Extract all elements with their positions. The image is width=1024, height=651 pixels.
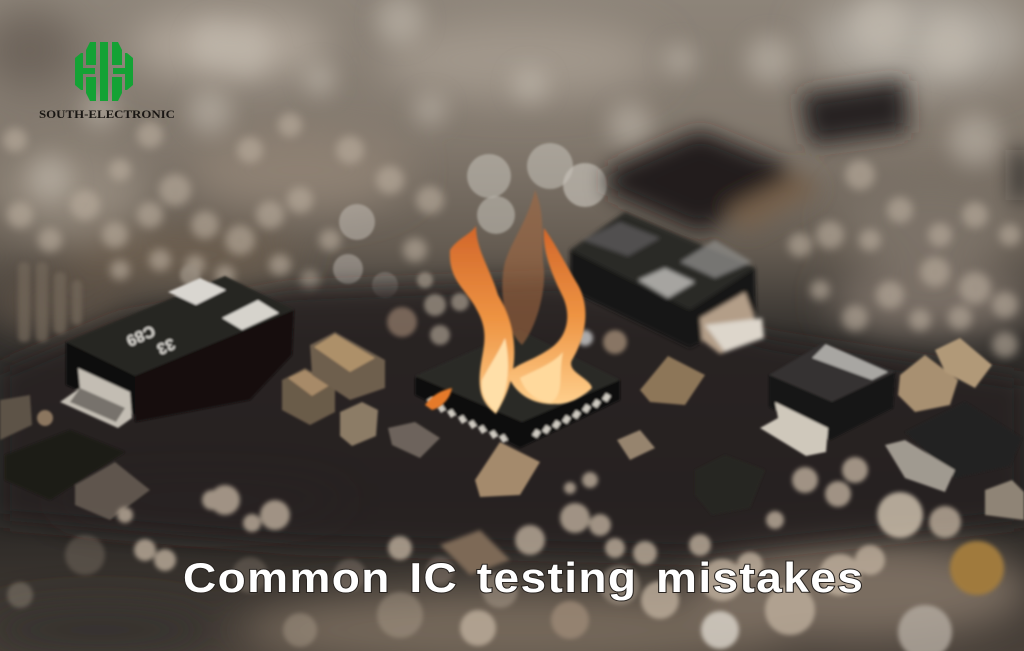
- mid-ground solder pads: [180, 265, 627, 354]
- chip pins: [427, 393, 611, 443]
- printed marks: [123, 321, 177, 357]
- printed marks: 33: [154, 334, 177, 357]
- burning IC chip: [415, 330, 620, 448]
- capacitor: upper centre chip: [570, 212, 764, 354]
- small components: left side: [0, 332, 440, 520]
- lower bokeh: [7, 457, 1004, 651]
- chip body: [415, 333, 620, 448]
- capacitor: right chip: [760, 343, 895, 456]
- title: Common IC testing mistakes: [183, 555, 864, 602]
- bokeh lights: [28, 0, 1001, 200]
- dark PCB mid layer: [0, 280, 1024, 555]
- bokeh texture field: [3, 113, 1021, 358]
- logo wordmark: SOUTH-ELECTRONIC: [39, 107, 175, 121]
- crisp bokeh discs: [333, 143, 607, 298]
- logo mark: [75, 42, 133, 101]
- logo: South-Electronic: [39, 42, 175, 121]
- small components: centre and right: [475, 338, 1024, 520]
- flames: [425, 190, 592, 414]
- background chips (out of focus): [608, 80, 1024, 232]
- printed marks: C89: [123, 321, 157, 349]
- dotted pads at left edge: [18, 262, 82, 342]
- capacitor: left C89 chip: [60, 276, 294, 428]
